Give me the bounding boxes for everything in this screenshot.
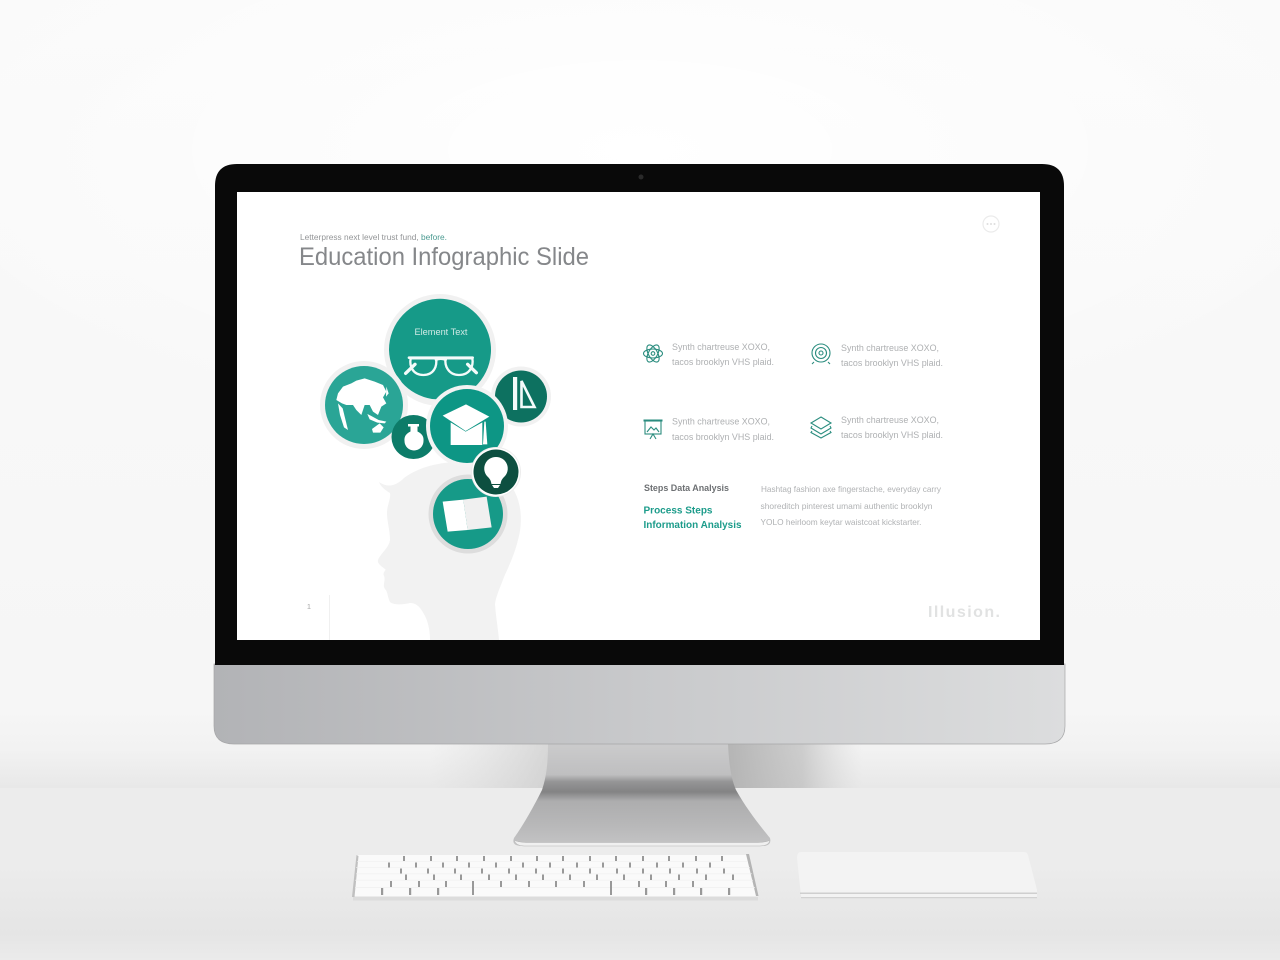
item text: tacos brooklyn VHS plaid. bbox=[841, 430, 943, 440]
icon: target bbox=[812, 344, 830, 364]
head silhouette bbox=[378, 462, 521, 640]
item text: Synth chartreuse XOXO, bbox=[672, 416, 770, 426]
page number: 1 bbox=[307, 602, 311, 611]
element text: Element Text bbox=[414, 327, 468, 337]
trackpad bbox=[797, 852, 1037, 898]
item: layers bbox=[811, 415, 943, 440]
icon: layers bbox=[811, 417, 831, 438]
process steps label: Information Analysis bbox=[644, 519, 742, 531]
keyboard bbox=[352, 854, 758, 900]
webcam bbox=[638, 174, 644, 180]
circle: globe bbox=[320, 361, 408, 449]
item text: tacos brooklyn VHS plaid. bbox=[672, 357, 774, 367]
circle: glasses bbox=[384, 294, 496, 406]
footer divider bbox=[329, 595, 330, 640]
brand wordmark: Illusion. bbox=[928, 604, 1000, 621]
monitor chin bbox=[214, 664, 1065, 744]
icon: flask bbox=[404, 424, 424, 451]
monitor bbox=[214, 164, 1065, 744]
item text: tacos brooklyn VHS plaid. bbox=[841, 358, 943, 368]
steps heading: Steps Data Analysis bbox=[644, 483, 729, 493]
subtitle: Letterpress next level trust fund, before. bbox=[300, 232, 447, 242]
steps description: YOLO heirloom keytar waistcoat kickstarter. bbox=[760, 517, 922, 527]
title: Education Infographic Slide bbox=[299, 243, 589, 271]
monitor bezel bbox=[215, 164, 1064, 665]
process steps label: Process Steps bbox=[644, 504, 713, 516]
circle: book bbox=[428, 474, 508, 554]
icon: graduation cap bbox=[443, 404, 489, 445]
keyboard row lines bbox=[355, 862, 755, 887]
circle: flask bbox=[392, 415, 436, 459]
item text: tacos brooklyn VHS plaid. bbox=[672, 432, 774, 442]
item text: Synth chartreuse XOXO, bbox=[672, 342, 770, 352]
slide content bbox=[299, 216, 1000, 640]
icon: atom bbox=[644, 343, 662, 364]
circle: triangle ruler bbox=[491, 366, 551, 426]
item: atom bbox=[644, 342, 774, 367]
icon: ruler and set square bbox=[513, 377, 534, 410]
icon: light bulb bbox=[484, 457, 508, 488]
slide screen bbox=[237, 192, 1040, 640]
keyboard key gaps bbox=[381, 856, 734, 895]
circle: light bulb bbox=[472, 448, 520, 496]
item: target bbox=[812, 343, 943, 368]
item: presentation board bbox=[644, 416, 774, 442]
circle: graduation cap bbox=[426, 385, 508, 467]
page menu icon bbox=[983, 216, 999, 232]
monitor stand bbox=[513, 744, 770, 846]
icon: glasses bbox=[406, 358, 476, 375]
steps description: Hashtag fashion axe fingerstache, everyday carry bbox=[761, 484, 942, 494]
item text: Synth chartreuse XOXO, bbox=[841, 415, 939, 425]
icon: presentation board bbox=[644, 420, 662, 439]
icon: asia map bbox=[336, 378, 389, 433]
steps description: shoreditch pinterest umami authentic brooklyn bbox=[760, 501, 933, 511]
icon: open book bbox=[443, 497, 492, 532]
item text: Synth chartreuse XOXO, bbox=[841, 343, 939, 353]
